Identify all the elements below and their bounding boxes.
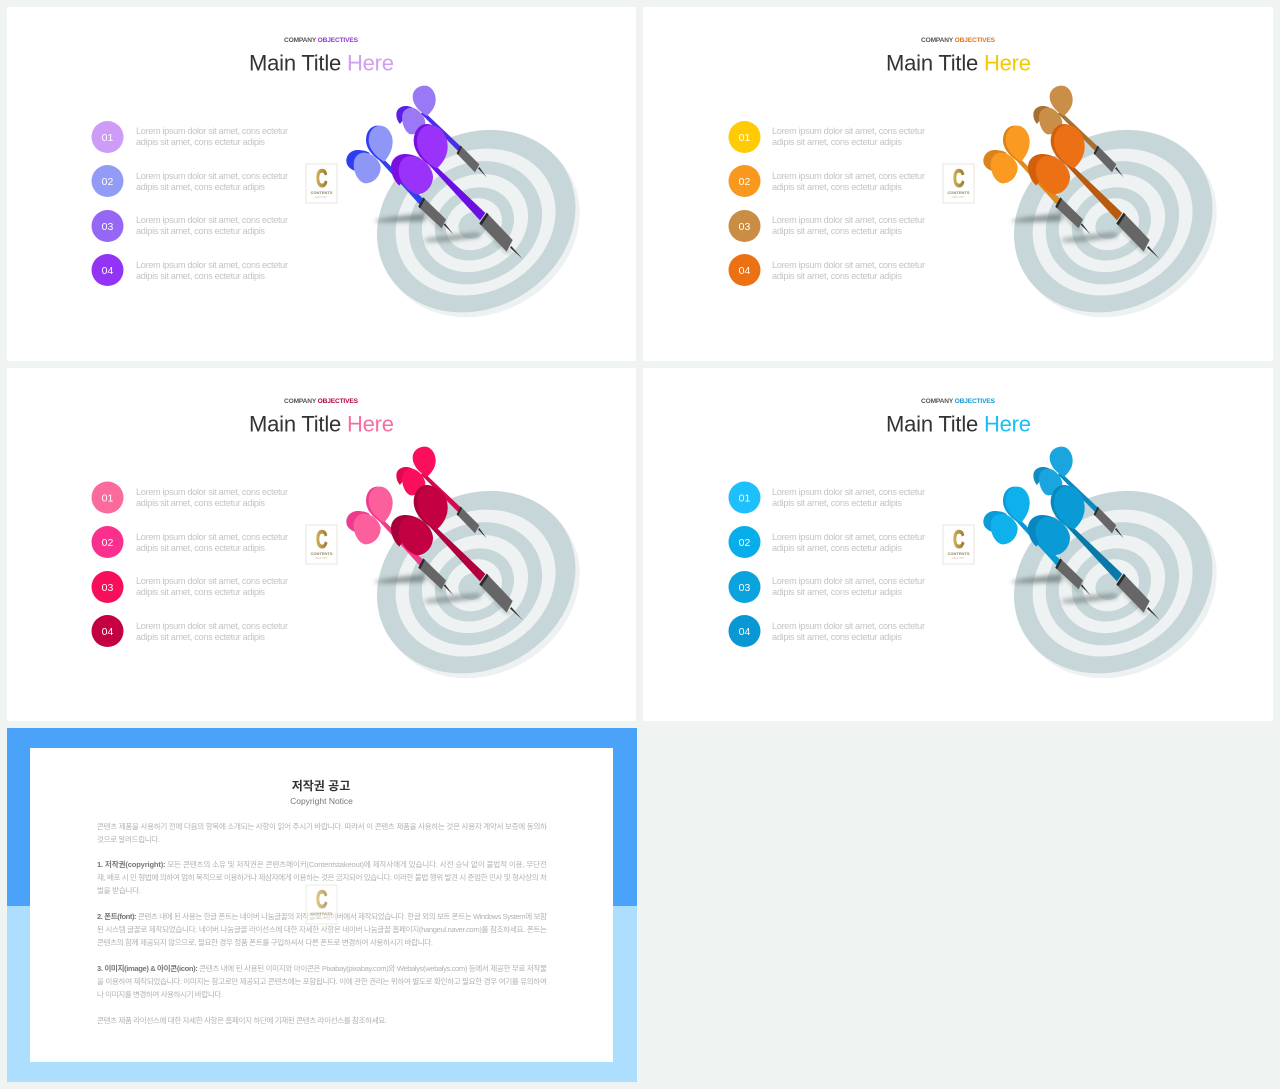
list item 01: 01 [739,492,750,504]
list item 02: adipis sit amet, cons ectetur adipis [136,182,265,192]
list item 01 [728,482,925,514]
list item 04 [92,615,288,647]
list item 04: adipis sit amet, cons ectetur adipis [772,271,902,281]
list item 03 [92,210,288,242]
list item 01: adipis sit amet, cons ectetur adipis [772,498,902,508]
heading: company objectives: COMPANY OBJECTIVES [284,37,359,44]
text block: section 1 copyright [97,859,547,895]
text block: introduction: 콘텐츠 제품을 사용하기 전에 다음의 항목에 소개되는 사항이 읽어 주시기 바랍니다. 따라서 이 콘텐츠 제품을 사용하는 것은 사용자 계약서 보증에 동의하 [97,821,547,831]
title: Main Title Here [886,412,1031,436]
list item 01: Lorem ipsum dolor sit amet, cons ectetur [772,487,925,497]
logo: contents watermark: C [953,526,964,554]
list item 02: 02 [102,176,113,188]
list item 02: 02 [739,176,750,188]
text block: introduction: 것으로 알려드립니다. [97,834,160,844]
heading: company objectives: COMPANY OBJECTIVES [921,37,996,44]
list item 01: Lorem ipsum dolor sit amet, cons ectetur [772,126,925,136]
list item 04: 04 [102,265,113,277]
list item 03: 03 [102,221,113,233]
logo: contents watermark: CONTENTS [948,551,970,556]
panel: orange objectives slide [643,7,1273,361]
list item 04: Lorem ipsum dolor sit amet, cons ectetur [772,260,925,270]
icon: three darts [346,86,523,259]
logo: contents watermark: REAL COPY [316,196,328,199]
logo: contents watermark: REAL COPY [952,557,965,560]
text block: closing license note: 콘텐츠 제품 라이선스에 대한 자세한 사항은 홈페이지 하단에 기재된 콘텐츠 라이선스를 참조하세요. [97,1015,387,1025]
list item 03 [92,571,288,603]
list item 01 [92,482,288,514]
list item 03: adipis sit amet, cons ectetur adipis [136,587,265,597]
list item 04: adipis sit amet, cons ectetur adipis [772,632,902,642]
list item 04: Lorem ipsum dolor sit amet, cons ectetur [136,621,288,631]
logo: contents watermark: REAL COPY [316,917,328,920]
logo: contents watermark [943,525,974,564]
panel: purple objectives slide [7,7,636,361]
list item 01: 01 [102,132,113,144]
text block: section 3 images and icons: 3. 이미지(image) & 아이콘(icon): 콘텐츠 내에 된 사용된 이미지와 아이콘은 Pixabay(pixabay.com)와 Webalys(webalys.com) 등에서 제공한 무료 저작물 [97,963,547,973]
list item 02: 02 [102,537,113,549]
list item 02 [92,165,288,197]
list item 02: Lorem ipsum dolor sit amet, cons ectetur [136,532,288,542]
logo: contents watermark: C [953,165,964,193]
logo: contents watermark [306,164,337,203]
title: Main Title Here [249,50,394,76]
panel: blue objectives slide [643,368,1273,721]
heading: company objectives: COMPANY OBJECTIVES [921,398,996,405]
list item 04 [728,254,925,286]
logo: contents watermark: C [316,526,328,554]
list item 02: Lorem ipsum dolor sit amet, cons ectetur [772,532,925,542]
logo: contents watermark: REAL COPY [316,557,328,560]
list item 04: 04 [739,626,750,638]
list item 01: Lorem ipsum dolor sit amet, cons ectetur [136,126,288,136]
text block: section 2 font: 된 시스템 글꼴로 제작되었습니다. 네이버 나눔글꼴 라이선스에 대한 자세한 사항은 네이버 나눔글꼴 홈페이지(hangeul.naver.com)를 참조하세요. 폰트는 [97,924,547,934]
list item 01 [728,121,925,153]
panel: copyright notice [7,728,637,1082]
list item 03: Lorem ipsum dolor sit amet, cons ectetur [772,215,925,225]
list item 02 [728,165,925,197]
list item 03: 03 [739,582,750,594]
list item 03: Lorem ipsum dolor sit amet, cons ectetur [136,215,288,225]
list item 03: adipis sit amet, cons ectetur adipis [772,226,902,236]
subheading: copyright notice: Copyright Notice [290,796,353,806]
list item 04: Lorem ipsum dolor sit amet, cons ectetur [772,621,925,631]
list item 02: Lorem ipsum dolor sit amet, cons ectetur [136,171,288,181]
text block: section 2 font: 2. 폰트(font): 콘텐츠 내에 된 사용는 한글 폰트는 네이버 나눔글꼴의 저작물로 네이버에서 제작되었습니다. 한글 외의 보트 폰트는 Windows System에 보함 [97,911,547,921]
logo: contents watermark [306,885,337,924]
list item 01: adipis sit amet, cons ectetur adipis [772,137,902,147]
list item 03: Lorem ipsum dolor sit amet, cons ectetur [772,576,925,586]
list item 04: adipis sit amet, cons ectetur adipis [136,632,265,642]
icon: three darts [983,447,1160,620]
list item 04 [728,615,925,647]
list item 04: Lorem ipsum dolor sit amet, cons ectetur [136,260,288,270]
list item 01: Lorem ipsum dolor sit amet, cons ectetur [136,487,288,497]
list item 03 [728,210,925,242]
icon: three darts [346,447,523,620]
list item 02: Lorem ipsum dolor sit amet, cons ectetur [772,171,925,181]
logo: contents watermark [943,164,974,203]
panel: pink objectives slide [7,368,636,721]
title: Main Title Here [249,412,394,436]
list item 03 [728,571,925,603]
list item 04: 04 [102,626,113,638]
list item 03: Lorem ipsum dolor sit amet, cons ectetur [136,576,288,586]
list item 02 [728,526,925,558]
list item 02: 02 [739,537,750,549]
list item 02 [92,526,288,558]
logo: contents watermark [306,525,337,564]
icon: dartboard [344,455,613,714]
logo: contents watermark: CONTENTS [948,190,970,195]
list item 01: 01 [739,132,750,144]
text block: section 1 copyright: 재, 배포 시 민 형법에 의하여 엄히 목적으로 이용하거나 제삼자에게 이용하는 것은 금지되어 있습니다. 이러한 불법 행위 발견 시 준엄한 민사 및 형사상의 처 [97,872,547,882]
icon: dartboard [981,94,1250,353]
logo: contents watermark: CONTENTS [310,190,333,195]
logo: contents watermark: C [316,165,328,193]
list item 04: adipis sit amet, cons ectetur adipis [136,271,265,281]
logo: contents watermark: C [316,886,328,914]
list item 03: 03 [739,221,750,233]
text block: section 1 copyright: 벌을 받습니다. [97,885,141,895]
list item 01: 01 [102,492,113,504]
list item 04 [92,254,288,286]
list item 04: 04 [739,265,750,277]
text block: section 1 copyright: 1. 저작권(copyright): 모든 콘텐츠의 소유 및 저작권은 콘텐츠메이커(Contentstakeout)에 제작사에게 있습니다. 사전 승낙 없이 불법적 이용, 무단전 [97,859,547,869]
text block: section 2 font [97,911,547,947]
list item 02: adipis sit amet, cons ectetur adipis [136,543,265,553]
list item 03: 03 [102,582,113,594]
logo: contents watermark: CONTENTS [310,551,333,556]
title: Main Title Here [886,50,1031,76]
list item 02: adipis sit amet, cons ectetur adipis [772,182,902,192]
list item 02: adipis sit amet, cons ectetur adipis [772,543,902,553]
logo: contents watermark: CONTENTS [310,911,333,916]
list item 01: adipis sit amet, cons ectetur adipis [136,498,265,508]
icon: three darts [983,86,1160,259]
icon: dartboard [344,94,613,353]
text block: section 3 images and icons [97,963,547,999]
list item 03: adipis sit amet, cons ectetur adipis [772,587,902,597]
text block: section 2 font: 콘텐츠의 함께 제공되지 않으므로, 필요한 경우 정품 폰트를 구입하셔서 다른 폰트로 변경하여 사용하시기 바랍니다. [97,937,433,947]
list item 01: adipis sit amet, cons ectetur adipis [136,137,265,147]
list item 03: adipis sit amet, cons ectetur adipis [136,226,265,236]
list item 01 [92,121,288,153]
text block: section 3 images and icons: 을 이용하여 제작되었습니다. 이미지는 참고로만 제공되고 콘텐츠에는 포함됩니다. 이에 관한 권리는 위하여 별도로 확인하고 필요한 경우 여기를 유의하여 [97,976,547,986]
heading: company objectives: COMPANY OBJECTIVES [284,398,359,405]
logo: contents watermark: REAL COPY [952,196,965,199]
heading: copyright notice in Korean: 저작권 공고 [292,778,350,793]
text block: section 3 images and icons: 나 이미지를 변경하여 사용하시기 바랍니다. [97,989,223,999]
icon: dartboard [981,455,1250,714]
text block: introduction [97,821,547,844]
